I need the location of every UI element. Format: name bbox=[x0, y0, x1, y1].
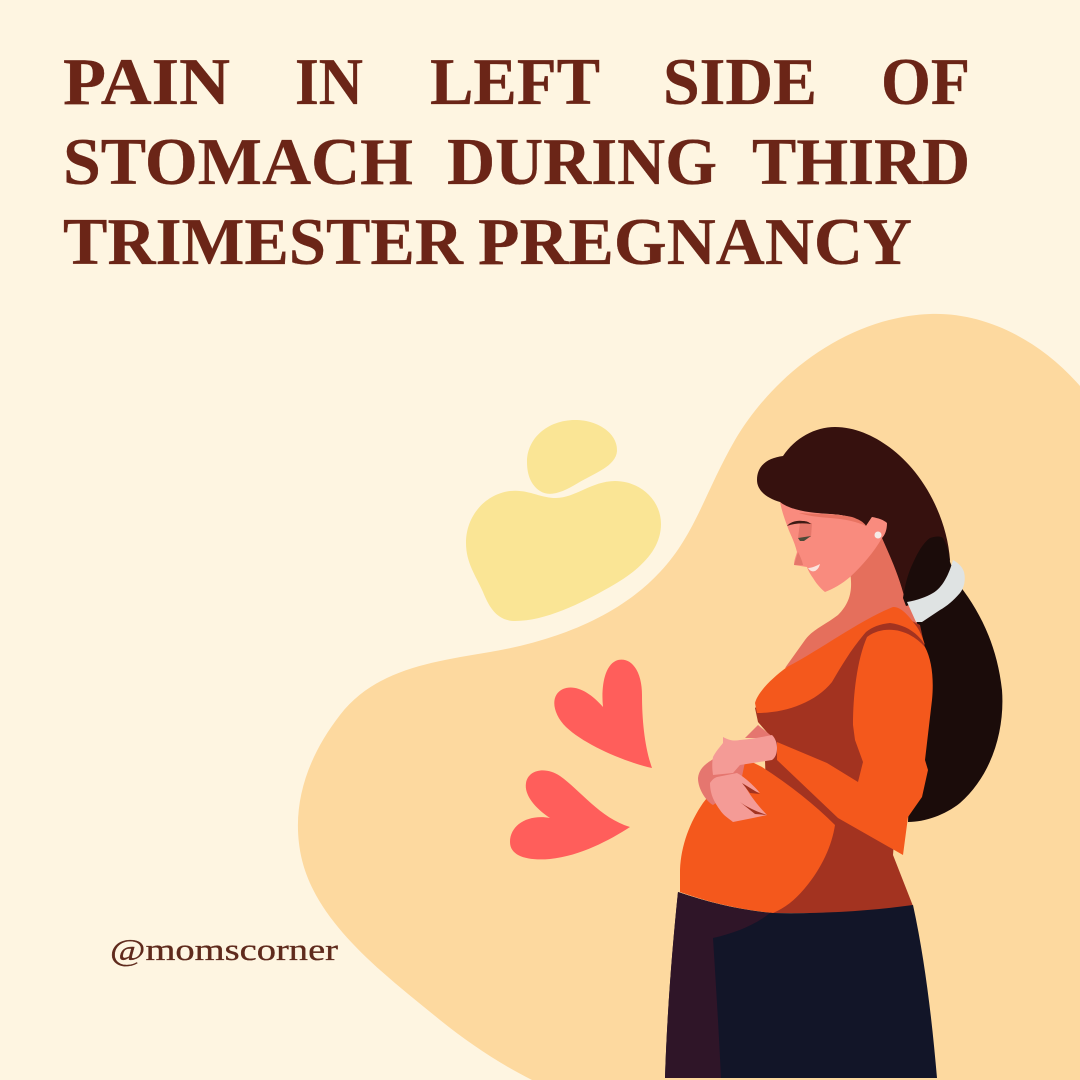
title: PREGNANCY bbox=[478, 205, 912, 279]
face bbox=[780, 502, 887, 592]
hair band bbox=[907, 560, 965, 622]
title: STOMACH bbox=[63, 125, 413, 199]
eyebrow bbox=[787, 521, 811, 526]
upper hand bbox=[712, 735, 777, 775]
decorative yellow blobs bbox=[466, 420, 661, 621]
title bbox=[63, 45, 970, 279]
hairline shade bbox=[799, 513, 866, 526]
hearts bbox=[510, 660, 652, 859]
neck and chest bbox=[785, 530, 918, 668]
title: LEFT bbox=[430, 45, 600, 119]
title: DURING bbox=[447, 125, 717, 199]
handle text: @momscorner bbox=[110, 932, 339, 967]
upper wrist bbox=[745, 725, 774, 738]
hair bbox=[757, 427, 950, 600]
torso bbox=[755, 610, 932, 913]
back arm bbox=[698, 758, 745, 805]
earring bbox=[874, 532, 882, 538]
peach background blob bbox=[298, 314, 1080, 1080]
eye shadow bbox=[798, 523, 812, 538]
sleeve bbox=[777, 630, 933, 855]
title: OF bbox=[881, 45, 970, 119]
shirt collar bbox=[755, 607, 925, 713]
nose shade bbox=[794, 552, 803, 565]
smile bbox=[808, 564, 820, 571]
skirt bbox=[665, 892, 937, 1078]
finger gaps bbox=[740, 783, 767, 815]
title: PAIN bbox=[63, 45, 230, 119]
title: IN bbox=[295, 45, 363, 119]
ponytail bbox=[900, 586, 1002, 822]
title: TRIMESTER bbox=[63, 205, 464, 279]
eye bbox=[798, 536, 811, 541]
belly bbox=[680, 762, 835, 913]
title: THIRD bbox=[752, 125, 970, 199]
hair shadow bbox=[903, 536, 954, 606]
lower hand bbox=[710, 773, 767, 822]
title: SIDE bbox=[663, 45, 817, 119]
pregnant woman illustration bbox=[665, 427, 1002, 1078]
skirt shadow fold bbox=[665, 892, 770, 1078]
